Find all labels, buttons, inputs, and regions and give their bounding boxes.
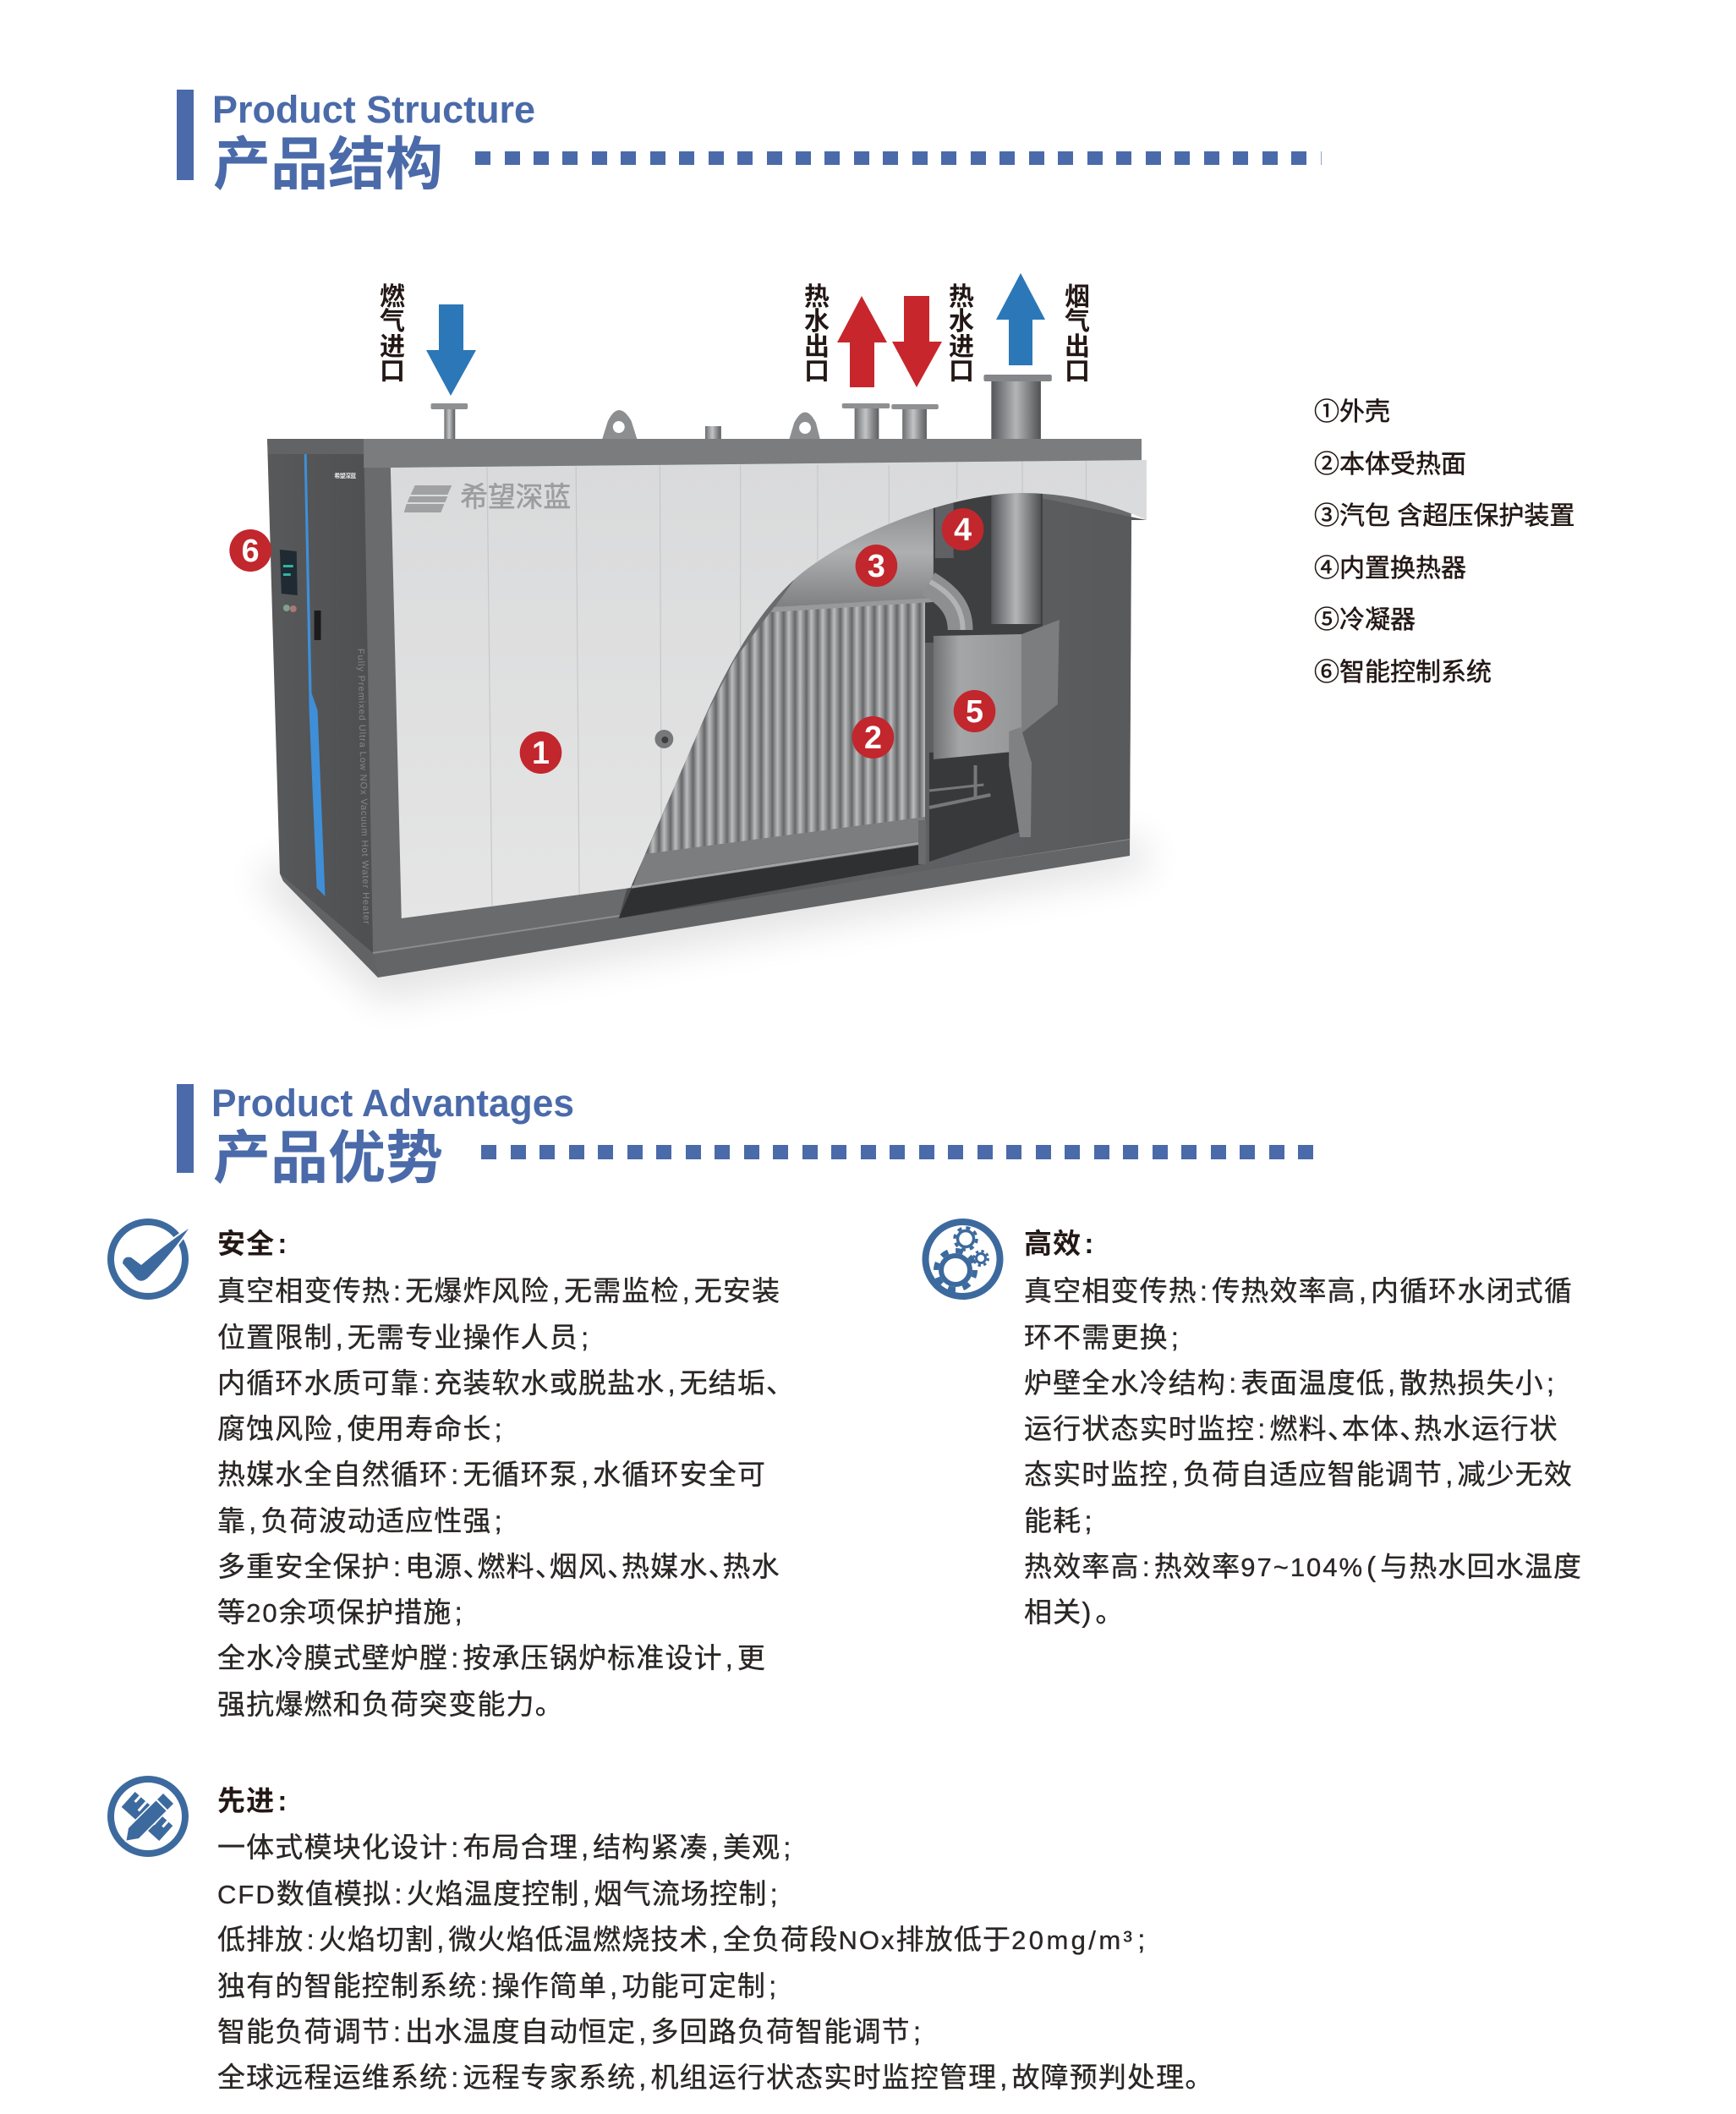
english title: Product Advantages [211, 1082, 574, 1125]
support bracket [1009, 727, 1032, 837]
label: gas inlet: 气 [380, 308, 405, 336]
dotted rule [481, 1145, 1313, 1159]
chinese title: 产品结构 [213, 133, 443, 197]
component legend [1314, 398, 1574, 687]
block: efficiency [1024, 1228, 1582, 1628]
block: safety: 多重安全保护:电源、燃料、烟风、热媒水、热水 [217, 1551, 780, 1582]
side vertical product text: Fully Premixed Ultra Low NOx Vacuum Hot Water Heater [355, 649, 371, 924]
number badges: 4 [954, 512, 972, 548]
number badges: 3 [868, 549, 885, 584]
top gear [955, 1228, 977, 1250]
component legend: ③汽包 含超压保护装置 [1314, 502, 1574, 530]
heat exchanger tubes [645, 599, 925, 856]
block: efficiency: 热效率高:热效率97~104%(与热水回水温度 [1024, 1551, 1582, 1582]
header: product advantages [177, 1082, 1313, 1191]
label: gas inlet: 进 [380, 333, 405, 361]
boiler illustration [229, 375, 1152, 1002]
label: flue outlet: 出 [1065, 333, 1090, 361]
header: product structure [177, 88, 1322, 197]
flue pipe [983, 375, 1052, 440]
label: gas inlet: 口 [380, 358, 405, 386]
block: safety: 热媒水全自然循环:无循环泵,水循环安全可 [217, 1459, 766, 1490]
hot water inlet pipe [891, 404, 939, 440]
lifting lug left [602, 410, 638, 440]
block: efficiency: 真空相变传热:传热效率高,内循环水闭式循 [1024, 1275, 1573, 1306]
english title: Product Structure [212, 88, 535, 131]
gas pipe [430, 403, 468, 440]
label: hot water outlet: 水 [804, 308, 830, 336]
label: flue outlet: 气 [1065, 308, 1090, 336]
component legend: ⑥智能控制系统 [1314, 659, 1492, 687]
lifting lug right [789, 413, 820, 440]
block: advanced: 全球远程运维系统:远程专家系统,机组运行状态实时监控管理,故障预判处理。 [217, 2062, 1214, 2093]
component legend: ②本体受热面 [1314, 451, 1466, 479]
chimney [991, 493, 1041, 624]
block: safety: 靠,负荷波动适应性强; [217, 1505, 507, 1536]
block: safety: 安全: [217, 1228, 291, 1259]
number badges: 5 [966, 694, 983, 730]
block: advanced: 先进: [217, 1785, 291, 1816]
small gear [974, 1251, 988, 1265]
block: advanced: 独有的智能控制系统:操作简单,功能可定制; [217, 1970, 780, 2002]
door lock [654, 730, 673, 748]
number badges: 1 [532, 736, 550, 771]
top pipes and lugs [430, 375, 1052, 440]
blue stripe [304, 454, 325, 896]
condenser [934, 620, 1060, 759]
chinese title: 产品优势 [213, 1126, 443, 1191]
block: advanced: CFD数值模拟:火焰温度控制,烟气流场控制; [217, 1878, 782, 1909]
block: safety: 内循环水质可靠:充装软水或脱盐水,无结垢、 [217, 1367, 795, 1399]
control screen [280, 550, 298, 595]
arrow: gas in [426, 304, 476, 396]
block: safety: 等20余项保护措施; [217, 1596, 467, 1628]
icon: pencil and ruler [111, 1779, 185, 1854]
label: hot water inlet: 口 [949, 358, 974, 386]
panel logo: 希望深蓝 [460, 481, 571, 512]
block: safety: 真空相变传热:无爆炸风险,无需监检,无安装 [217, 1275, 780, 1306]
burner pipes [929, 765, 990, 808]
big gear [936, 1251, 975, 1290]
block: efficiency: 相关)。 [1024, 1596, 1124, 1628]
number badges: 2 [864, 720, 882, 756]
block: safety: 全水冷膜式壁炉膛:按承压锅炉标准设计,更 [217, 1642, 766, 1673]
side face [267, 439, 378, 978]
block: advanced: 一体式模块化设计:布局合理,结构紧凑,美观; [217, 1832, 795, 1863]
arrow: hot water in [892, 296, 942, 387]
lower header [632, 817, 925, 887]
label: hot water outlet: 出 [804, 333, 830, 361]
arrow: hot water out [837, 296, 887, 387]
block: safety: 强抗爆燃和负荷突变能力。 [217, 1689, 564, 1720]
front panel [391, 460, 1147, 918]
header bar [177, 1084, 194, 1173]
ground shadow [254, 837, 1152, 1002]
label: hot water outlet: 口 [804, 358, 830, 386]
label: gas inlet: 燃 [380, 283, 405, 311]
block: safety: 位置限制,无需专业操作人员; [217, 1322, 593, 1353]
label: flue outlet: 口 [1065, 358, 1090, 386]
small stub [705, 426, 721, 440]
front frame [364, 439, 1142, 953]
block: advanced: 智能负荷调节:出水温度自动恒定,多回路负荷智能调节; [217, 2016, 925, 2047]
component legend: ⑤冷凝器 [1314, 606, 1416, 634]
label: hot water inlet: 热 [949, 283, 974, 311]
block: advanced [217, 1785, 1214, 2093]
block: efficiency: 运行状态实时监控:燃料、本体、热水运行状 [1024, 1413, 1558, 1444]
label: hot water outlet: 热 [804, 283, 830, 311]
number badges [229, 508, 995, 774]
base plinth [373, 839, 1130, 978]
number badges: 6 [242, 534, 260, 569]
block: efficiency: 炉壁全水冷结构:表面温度低,散热损失小; [1024, 1367, 1558, 1399]
component legend: ①外壳 [1314, 398, 1390, 426]
block: safety [217, 1228, 795, 1720]
label: flue outlet: 烟 [1065, 283, 1090, 311]
header bar [177, 90, 194, 180]
dotted rule [475, 151, 1322, 165]
block: efficiency: 高效: [1024, 1228, 1098, 1259]
component legend: ④内置换热器 [1314, 555, 1466, 583]
pipe elbow [928, 582, 963, 630]
arrow: flue out [996, 273, 1045, 365]
hot water outlet pipe [842, 403, 890, 440]
side logo: 希望深蓝 [334, 472, 356, 479]
drum [772, 505, 934, 611]
pencil [121, 1794, 173, 1846]
floor dark area [929, 748, 1026, 862]
block: advanced: 低排放:火焰切割,微火焰低温燃烧技术,全负荷段NOx排放低于20mg/m³; [217, 1924, 1149, 1955]
ruler [122, 1792, 173, 1841]
lower dark cavity [619, 845, 922, 918]
interior cavity [619, 493, 1147, 918]
panel logo [404, 481, 571, 512]
card slot [315, 611, 321, 640]
control buttons [283, 605, 297, 612]
icon: check mark [111, 1222, 189, 1296]
block: safety: 腐蚀风险,使用寿命长; [217, 1413, 507, 1444]
block: efficiency: 态实时监控,负荷自适应智能调节,减少无效 [1024, 1459, 1573, 1490]
block: efficiency: 环不需更换; [1024, 1322, 1183, 1353]
back chamber [920, 493, 1043, 643]
label: hot water inlet: 进 [949, 333, 974, 361]
label: hot water inlet: 水 [949, 308, 974, 336]
icon: gears [925, 1222, 999, 1296]
block: efficiency: 能耗; [1024, 1505, 1096, 1536]
